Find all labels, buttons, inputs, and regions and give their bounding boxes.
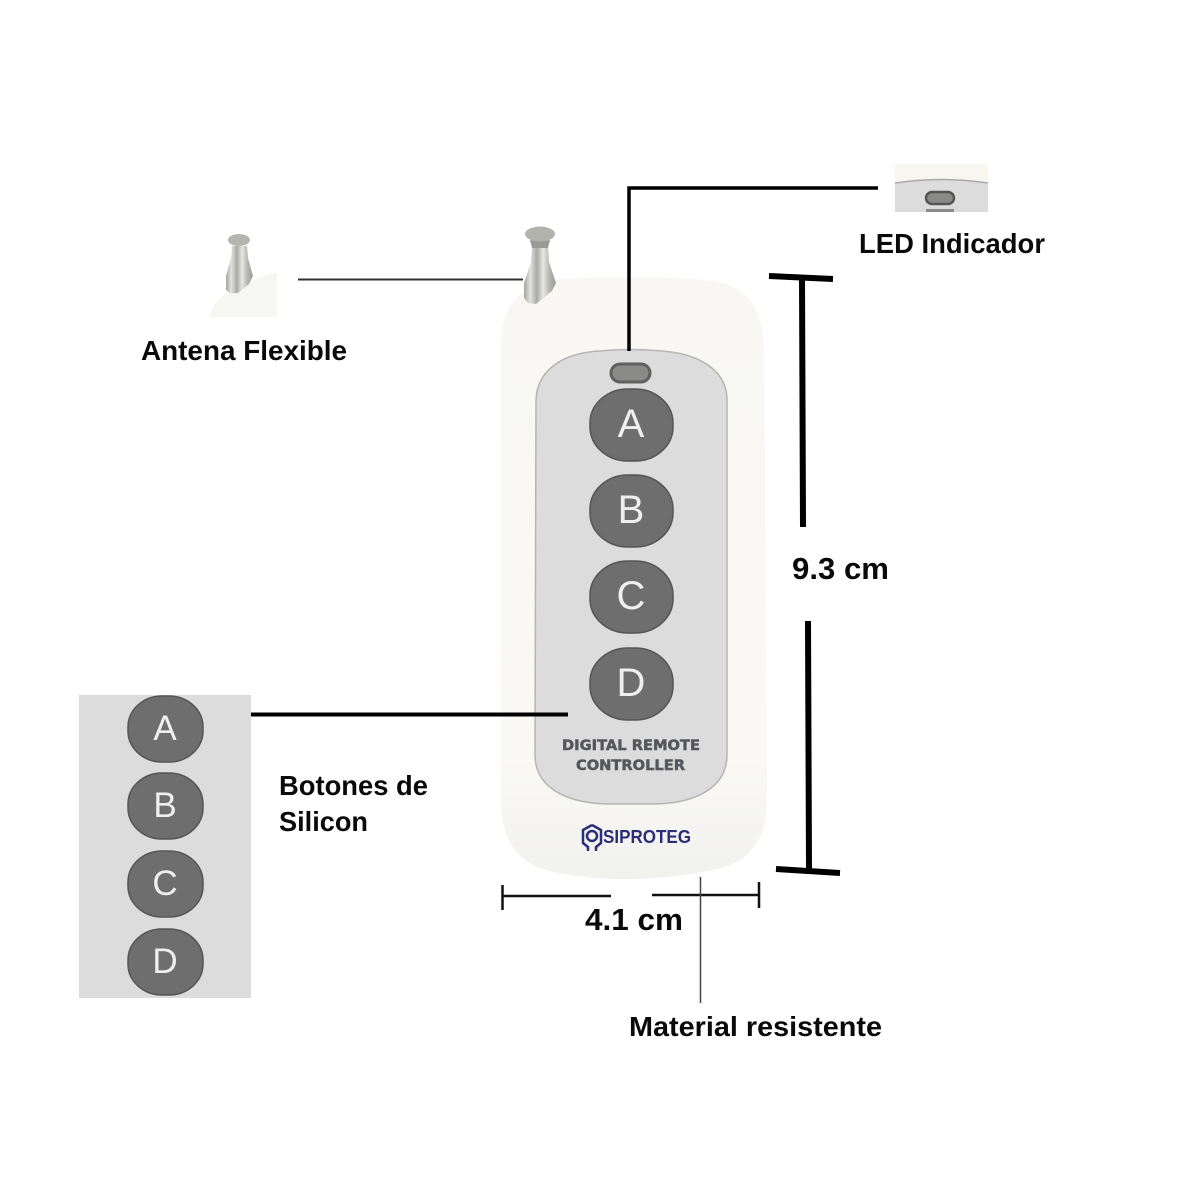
width dimension <box>502 882 759 937</box>
label: botones de silicon: Botones de <box>279 770 428 801</box>
antenna <box>524 226 556 304</box>
inset button A <box>128 696 203 762</box>
SIPROTEG logo: SIPROTEG <box>603 827 691 847</box>
device caption <box>562 738 700 774</box>
label: botones de silicon: Silicon <box>279 806 368 837</box>
button C <box>590 561 673 633</box>
leader line: antenna <box>298 278 523 280</box>
device caption: DIGITAL REMOTE <box>562 738 700 754</box>
height dimension <box>769 276 889 873</box>
label: antena flexible: Antena Flexible <box>141 335 347 366</box>
label: width: 4.1 cm <box>585 902 683 937</box>
device caption: CONTROLLER <box>576 758 685 774</box>
inset button B <box>128 773 203 839</box>
LED detail image <box>895 164 988 212</box>
inset button B: B <box>153 786 177 825</box>
inset button A: A <box>153 709 177 748</box>
antenna detail image <box>209 234 277 317</box>
label: LED indicador: LED Indicador <box>859 228 1045 259</box>
button D: D <box>617 661 645 705</box>
remote control <box>501 226 767 879</box>
leader line: material <box>700 877 702 1003</box>
leader line: buttons <box>251 712 568 716</box>
button C: C <box>617 574 645 618</box>
inset button C: C <box>152 864 178 903</box>
SIPROTEG logo <box>583 825 691 851</box>
leader line: LED <box>629 188 878 351</box>
button B: B <box>618 488 644 532</box>
button B <box>590 475 673 547</box>
button A <box>590 389 673 461</box>
label: botones de silicon <box>279 770 428 837</box>
label: material resistente: Material resistente <box>629 1011 882 1042</box>
label: height: 9.3 cm <box>792 551 889 586</box>
inset button C <box>128 851 203 917</box>
buttons detail inset <box>79 695 251 998</box>
button D <box>590 648 673 720</box>
remote body <box>501 277 767 879</box>
button A: A <box>618 402 645 446</box>
LED indicator <box>611 364 650 382</box>
inset button D: D <box>152 942 178 981</box>
inset button D <box>128 929 203 995</box>
grey front panel <box>535 350 727 804</box>
